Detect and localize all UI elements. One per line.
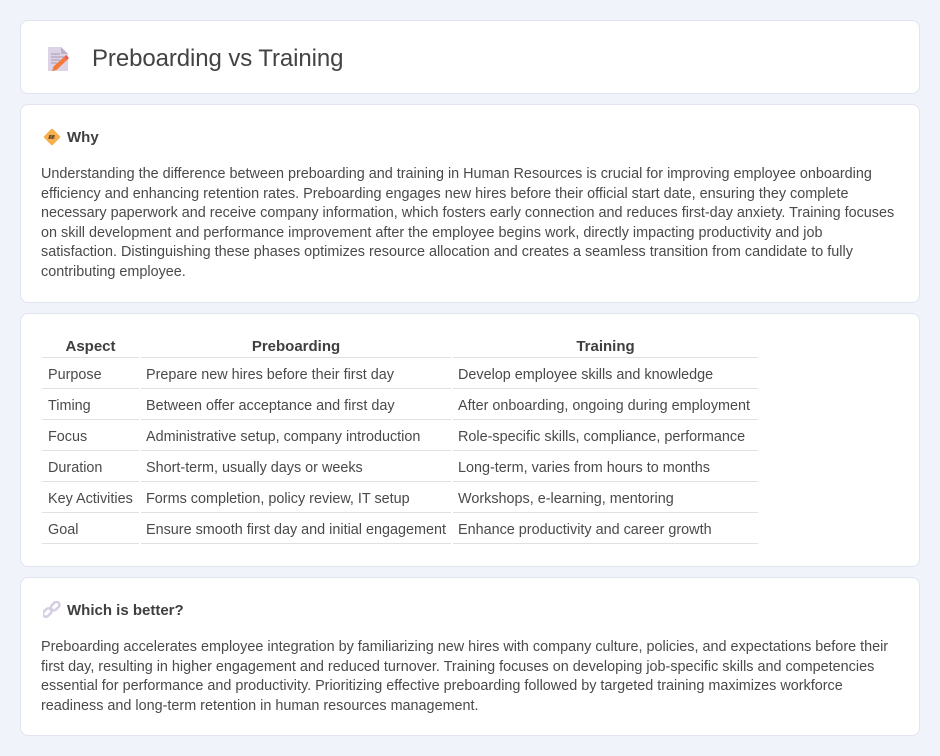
why text block: necessary paperwork and receive company information, which fosters early connection and reduces first-day anxiety. Training focuses <box>41 205 894 221</box>
which is better text block <box>41 639 888 714</box>
panel: comparison table <box>20 313 920 567</box>
title: Preboarding vs Training <box>92 45 343 72</box>
comparison table: Short-term, usually days or weeks <box>146 460 363 476</box>
heading: why: Why <box>67 129 99 146</box>
which is better text block: Preboarding accelerates employee integration by familiarizing new hires with company culture, policies, and expectations before their <box>41 639 888 655</box>
comparison table: Develop employee skills and knowledge <box>458 367 713 383</box>
comparison table: Duration <box>48 460 102 476</box>
why text block: on skill development and performance improvement after the employee begins work, directly impacting productivity and job <box>41 224 822 240</box>
header panel <box>20 20 920 94</box>
comparison table: Purpose <box>48 367 102 383</box>
comparison table: Aspect <box>65 338 116 355</box>
panel: which is better <box>20 577 920 736</box>
comparison table: Enhance productivity and career growth <box>458 522 712 538</box>
comparison table: Goal <box>48 522 78 538</box>
icon: warning diamond <box>44 128 60 146</box>
which is better text block: readiness and long-term retention in human resources management. <box>41 698 479 714</box>
comparison table: Timing <box>48 398 91 414</box>
comparison table: Focus <box>48 429 87 445</box>
why text block: contributing employee. <box>41 264 186 280</box>
comparison table: Forms completion, policy review, IT setup <box>146 491 410 507</box>
comparison table: Workshops, e-learning, mentoring <box>458 491 674 507</box>
heading: which is better: Which is better? <box>67 602 184 619</box>
comparison table: Administrative setup, company introduction <box>146 429 420 445</box>
comparison table: Prepare new hires before their first day <box>146 367 394 383</box>
panel: why <box>20 104 920 303</box>
comparison table: Preboarding <box>252 338 340 355</box>
icon: chain link <box>43 601 61 618</box>
comparison table: Long-term, varies from hours to months <box>458 460 710 476</box>
which is better text block: essential for performance and productivity. Prioritizing effective preboarding followed by targeted training maximizes workforce <box>41 678 843 694</box>
comparison table: Role-specific skills, compliance, performance <box>458 429 745 445</box>
comparison table <box>42 338 758 544</box>
icon: document with pencil <box>48 47 69 71</box>
why text block: Understanding the difference between preboarding and training in Human Resources is crucial for improving employee onboarding <box>41 166 872 182</box>
comparison table: Ensure smooth first day and initial engagement <box>146 522 446 538</box>
comparison table: Key Activities <box>48 491 133 507</box>
why text block <box>41 166 894 280</box>
comparison table: Training <box>576 338 635 355</box>
why text block: satisfaction. Distinguishing these phases optimizes resource allocation and creates a seamless transition from candidate to fully <box>41 244 853 260</box>
why text block: efficiency and enhancing retention rates. Preboarding engages new hires before their official start date, ensuring they complete <box>41 186 848 202</box>
comparison table: After onboarding, ongoing during employment <box>458 398 750 414</box>
comparison table: Between offer acceptance and first day <box>146 398 395 414</box>
which is better text block: first day, resulting in higher engagement and reduced turnover. Training focuses on developing job-specific skills and competencies <box>41 658 874 674</box>
